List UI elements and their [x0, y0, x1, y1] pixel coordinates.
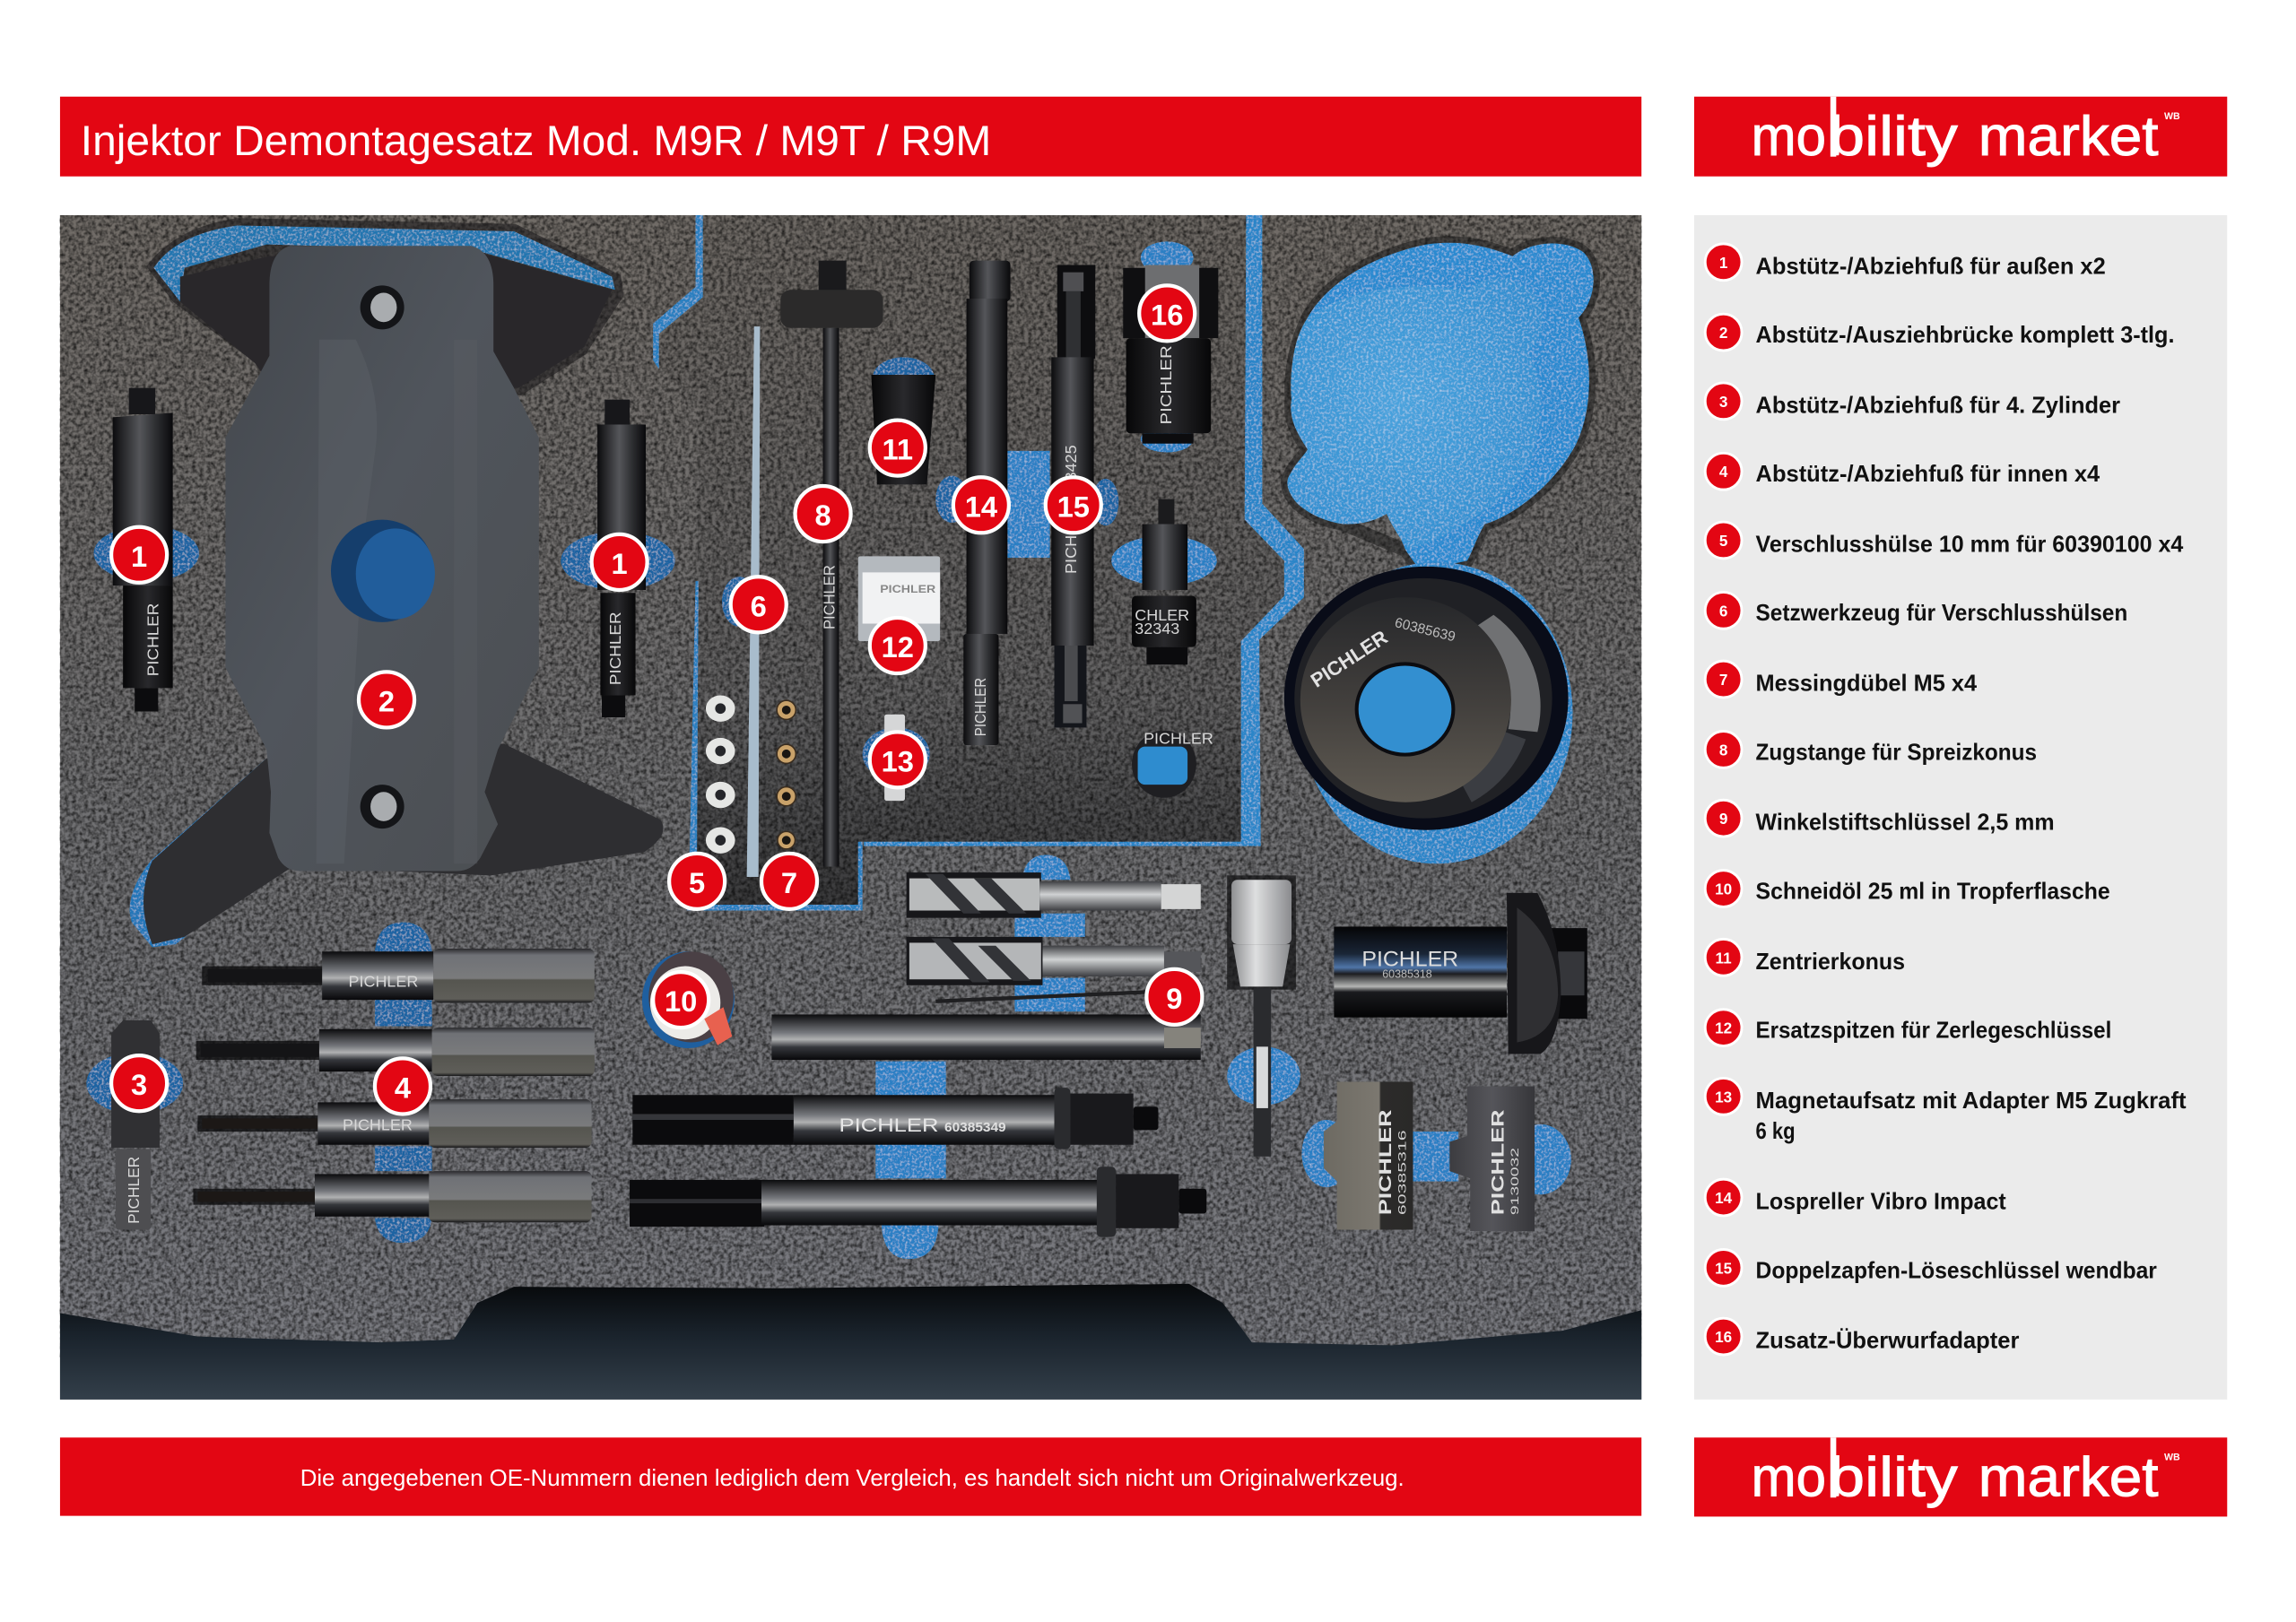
item 6: [1705, 592, 2127, 629]
ring puller disc: 60385639: [1393, 615, 1457, 645]
tool 4: four support feet: [194, 949, 595, 1222]
item 3: 3: [1719, 393, 1727, 411]
blue disc pocket inner: [1287, 278, 1544, 549]
item 8: [1705, 732, 2037, 768]
marker 11: 11: [883, 433, 913, 466]
blue disc pocket outer: [1308, 243, 1594, 571]
item 14: 14: [1715, 1189, 1733, 1207]
marker 7: [761, 854, 817, 909]
tool 10: cutting oil bottle: [642, 951, 735, 1048]
two sleeve adapters: PICHLER: [1376, 1110, 1396, 1215]
logo: mobility market bottom: bility: [1829, 1447, 1958, 1509]
tool 8: pull rod with knob: [780, 261, 883, 867]
foot row 2: [196, 1028, 595, 1076]
blue cut line left top: [653, 215, 703, 369]
tool 13: magnetic attachment: [884, 715, 905, 801]
blue top band around bridge: [153, 225, 615, 301]
item 13: [1705, 1078, 2187, 1144]
marker 11: [870, 421, 926, 476]
item 2: Abstütz-/Ausziehbrücke komplett 3-tlg.: [1756, 321, 2174, 348]
marker 3: 3: [131, 1068, 147, 1101]
item 13: 6 kg: [1756, 1117, 1796, 1144]
blue crescent around ring: [1300, 562, 1572, 863]
logo: mobility market bottom: market: [1979, 1447, 2159, 1509]
marker 16: [1139, 285, 1195, 341]
tool 9: pin wrench and end mills: [907, 872, 1201, 1002]
item 5: 5: [1719, 532, 1728, 550]
tool 1 left: support foot: PICHLER: [144, 603, 161, 676]
marker 14: 14: [965, 490, 997, 523]
item 11: 11: [1716, 949, 1732, 967]
shadow around disc pocket: [1287, 243, 1594, 571]
rod long: [771, 1014, 1201, 1060]
tool 2: support bridge plate: [225, 246, 539, 871]
item 2: 2: [1719, 324, 1727, 342]
item 16: Zusatz-Überwurfadapter: [1756, 1327, 2019, 1354]
marker 10: [653, 972, 709, 1028]
item 11: Zentrierkonus: [1756, 948, 1905, 975]
markers on photo: [111, 285, 1202, 1114]
adapter disc small: [1132, 729, 1213, 798]
item 16: [1705, 1318, 2019, 1355]
marker 5: 5: [689, 866, 705, 899]
marker 7: 7: [781, 866, 797, 899]
item 1: [1705, 244, 2106, 281]
logo: mobility market bottom: mo: [1752, 1447, 1826, 1509]
T tool: [1227, 875, 1296, 1157]
marker 1a: 1: [131, 540, 147, 573]
pockets: [86, 357, 1118, 1243]
marker 12: 12: [882, 630, 914, 664]
adapter with thread: 32343: [1135, 620, 1179, 638]
threaded rod 60385349: PICHLER: [839, 1115, 939, 1136]
tool 1 left: support foot: [113, 388, 173, 711]
foot row 1: [202, 949, 595, 1002]
two sleeve adapters: 9130032: [1509, 1148, 1521, 1215]
marker 4: [375, 1058, 430, 1114]
marker 6: [731, 577, 787, 632]
marker 10: 10: [665, 984, 697, 1018]
adapter with thread: [1132, 499, 1196, 664]
two sleeve adapters: 60385316: [1396, 1130, 1408, 1215]
footer disclaimer bar: [60, 1437, 1641, 1516]
marker 15: 15: [1057, 490, 1090, 523]
item 4: [1705, 453, 2100, 490]
item 5: [1705, 522, 2184, 559]
item 4: 4: [1719, 463, 1728, 481]
item 15: Doppelzapfen-Löseschlüssel wendbar: [1756, 1256, 2157, 1283]
tool 16: additional adapter: PICHLER: [1157, 345, 1175, 424]
foot row 4: [194, 1171, 592, 1222]
item 10: [1705, 871, 2110, 906]
marker 9: 9: [1166, 982, 1182, 1015]
logo: mobility market top: market: [1979, 106, 2159, 168]
tool 6: setting rod: [747, 326, 760, 877]
logo: mobility market top: bility: [1829, 106, 1958, 168]
item 7: [1705, 661, 1978, 698]
marker 15: [1046, 477, 1101, 533]
title bar: Injektor Demontagesatz Mod. M9R / M9T / R9M: [81, 117, 991, 165]
marker 5: [669, 854, 725, 909]
blue cut line right: [864, 215, 1304, 846]
marker 14: [953, 477, 1009, 533]
logo: mobility market top: [1694, 97, 2227, 177]
marker 2: [359, 672, 414, 727]
marker 9: [1146, 969, 1202, 1025]
item 2: [1705, 314, 2174, 351]
item 10: 10: [1715, 880, 1732, 898]
marker 4: 4: [395, 1071, 411, 1104]
panel: parts legend: [1694, 215, 2227, 1400]
foam base: [60, 215, 1641, 1400]
tool 16: additional adapter: [1123, 265, 1218, 444]
adapter disc small: PICHLER: [1144, 729, 1213, 747]
bridge wing top: [180, 252, 612, 388]
item 9: [1705, 800, 2055, 837]
tool 5: sealing sleeves: [706, 696, 735, 854]
large cylinder with knob: 60385318: [1382, 967, 1432, 981]
item 12: Ersatzspitzen für Zerlegeschlüssel: [1756, 1017, 2111, 1044]
logo: mobility market bottom: WB: [2164, 1453, 2180, 1463]
case floor below foam: [60, 1284, 1641, 1400]
foot row 3: PICHLER: [343, 1115, 413, 1133]
large cylinder with knob: PICHLER: [1361, 948, 1458, 972]
ring puller disc: [1284, 567, 1569, 830]
title bar: [60, 97, 1641, 177]
threaded rod 60385349: [632, 1088, 1158, 1149]
item 6: 6: [1719, 602, 1727, 620]
item 13: Magnetaufsatz mit Adapter M5 Zugkraft: [1756, 1087, 2187, 1114]
item 15: [1705, 1249, 2157, 1286]
marker 6: 6: [751, 589, 767, 622]
central recess: [659, 215, 1284, 907]
logo: mobility market top: mo: [1752, 106, 1826, 168]
panel: tool case photo: [60, 215, 1641, 1400]
two sleeve adapters: PICHLER: [1489, 1110, 1509, 1215]
blue foam parts: [86, 215, 1594, 1259]
marker 13: [870, 732, 926, 787]
foam texture: [60, 215, 1641, 1357]
tool 12: spare tips card: PICHLER: [880, 583, 935, 595]
blue cut line lower left: [687, 581, 863, 911]
item 16: 16: [1715, 1328, 1732, 1346]
marker 3: [111, 1055, 167, 1111]
item 14: [1705, 1179, 2006, 1216]
tool 15: double pin wrench: [1051, 265, 1095, 727]
item 12: 12: [1715, 1019, 1732, 1037]
item 4: Abstütz-/Abziehfuß für innen x4: [1756, 460, 2100, 487]
item 13: 13: [1715, 1088, 1732, 1106]
marker 1a: [111, 527, 167, 583]
foot row 3: [197, 1099, 592, 1148]
large cylinder with knob: [1334, 893, 1587, 1054]
marker 1b: [592, 534, 648, 590]
tool 3: support foot 4th cylinder: PICHLER: [125, 1157, 143, 1224]
tool 1 right: support foot: PICHLER: [606, 612, 624, 685]
tool 8: pull rod with knob: PICHLER: [821, 565, 839, 629]
tool 1 right: support foot: [597, 400, 646, 717]
logo: mobility market top: WB: [2164, 111, 2180, 122]
tool 14: vibro impact: PICHLER: [971, 678, 989, 736]
threaded rod 60385349: 60385349: [944, 1121, 1006, 1135]
logo: mobility market bottom: [1694, 1437, 2227, 1516]
tool 14: vibro impact: [963, 261, 1011, 745]
item 8: Zugstange für Spreizkonus: [1756, 738, 2037, 765]
item 3: Abstütz-/Abziehfuß für 4. Zylinder: [1756, 391, 2120, 418]
marker 2: 2: [378, 684, 395, 717]
marker 8: [796, 486, 851, 542]
ring puller disc: PICHLER: [1307, 626, 1392, 692]
footer disclaimer bar: Die angegebenen OE-Nummern dienen lediglich dem Vergleich, es handelt sich nicht um Originalwerkzeug.: [300, 1464, 1405, 1491]
item 9: 9: [1719, 810, 1727, 828]
tool 3: support foot 4th cylinder: [111, 1020, 160, 1229]
marker 16: 16: [1151, 298, 1183, 331]
item 7: 7: [1719, 671, 1727, 689]
item 1: 1: [1719, 254, 1728, 272]
item 3: [1705, 383, 2120, 420]
tool 12: spare tips card: [858, 556, 940, 641]
item 14: Lospreller Vibro Impact: [1756, 1188, 2006, 1215]
item 15: 15: [1715, 1259, 1733, 1277]
item 12: [1705, 1010, 2111, 1046]
two sleeve adapters: [1324, 1082, 1535, 1231]
tool 15: double pin wrench: PICHLER 383425: [1062, 445, 1080, 574]
marker 12: [870, 618, 926, 673]
item 6: Setzwerkzeug für Verschlusshülsen: [1756, 599, 2127, 626]
item 10: Schneidöl 25 ml in Tropferflasche: [1756, 877, 2110, 904]
marker 8: 8: [814, 499, 831, 532]
threaded rod lower: [630, 1167, 1206, 1237]
item 5: Verschlusshülse 10 mm für 60390100 x4: [1756, 531, 2184, 558]
item 8: 8: [1719, 741, 1727, 759]
item 1: Abstütz-/Abziehfuß für außen x2: [1756, 252, 2106, 279]
bridge wing bottom: [144, 743, 664, 944]
item 9: Winkelstiftschlüssel 2,5 mm: [1756, 809, 2055, 836]
marker 13: 13: [882, 744, 914, 777]
marker 1b: 1: [612, 547, 628, 580]
shadow around big pocket: [146, 218, 624, 395]
tool 7: brass dowels: [777, 700, 796, 849]
adapter with thread: CHLER: [1135, 606, 1189, 624]
tool 11: centering cone: [871, 375, 935, 484]
blue lower left edge of bridge: [130, 759, 278, 947]
item 11: [1705, 939, 1905, 976]
item 7: Messingdübel M5 x4: [1756, 670, 1978, 697]
foot row 1: PICHLER: [349, 972, 418, 990]
